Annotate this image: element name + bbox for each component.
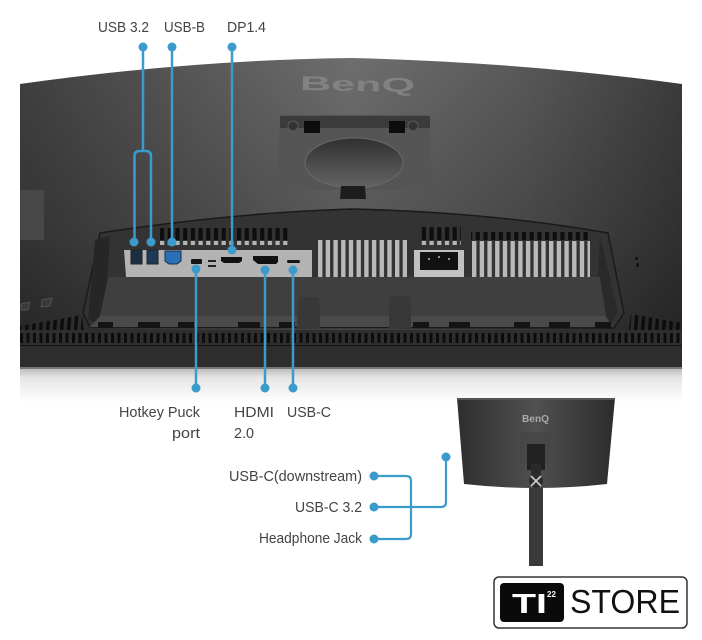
- dark slots: [160, 228, 290, 240]
- port: USB-B: [165, 251, 181, 264]
- mount square right: [389, 121, 405, 133]
- port: hotkey puck: [191, 259, 202, 264]
- lower frame: [20, 330, 682, 346]
- stand clip left: [297, 297, 320, 328]
- labels: side ports: [229, 469, 363, 547]
- labels: top ports: USB 3.2: [98, 20, 149, 36]
- labels: bottom ports: [119, 405, 331, 442]
- small mark: [208, 260, 216, 267]
- cavity floor: [100, 277, 606, 316]
- labels: top ports: [98, 20, 266, 36]
- labels: bottom ports: HDMI: [234, 405, 274, 421]
- floor shadow: [20, 369, 682, 403]
- stand mount recess: [276, 115, 432, 199]
- STORE: STORE: [570, 583, 680, 620]
- vent bars middle: [318, 240, 407, 277]
- round recess: [305, 138, 403, 188]
- port: USB 3.2 pair: [131, 250, 158, 264]
- mount screw right: [408, 121, 418, 131]
- floor clips: [98, 322, 611, 328]
- labels: side ports: USB-C 3.2: [295, 500, 362, 516]
- left side panel: [20, 190, 44, 240]
- TI: TI: [512, 588, 547, 619]
- hinge: [529, 474, 543, 488]
- monitor back: [457, 398, 615, 488]
- labels: side ports: Headphone Jack: [259, 531, 363, 547]
- labels: bottom ports: port: [172, 426, 200, 442]
- mount square left: [304, 121, 320, 133]
- labels: side ports: USB-C(downstream): [229, 469, 362, 485]
- callouts: side ports: [370, 452, 450, 544]
- stand clip right: [389, 296, 411, 328]
- white card: [483, 566, 702, 640]
- black badge: [500, 583, 564, 622]
- vent bars right: [472, 241, 590, 277]
- store logo: [483, 566, 702, 640]
- labels: bottom ports: 2.0: [234, 426, 254, 442]
- side vents left: [20, 315, 85, 343]
- 22: 22: [547, 590, 556, 599]
- callout dots: [130, 42, 298, 392]
- callouts: top ports: [134, 47, 293, 388]
- monitor rear body: [20, 58, 682, 369]
- port: DisplayPort: [221, 257, 242, 263]
- logo frame: [494, 577, 687, 628]
- port: HDMI: [253, 256, 278, 264]
- labels: top ports: DP1.4: [227, 20, 266, 36]
- mount screw left: [288, 121, 298, 131]
- side buttons: [21, 298, 52, 310]
- port cavity: [83, 209, 624, 328]
- latch: [340, 186, 366, 199]
- stand column: [529, 480, 543, 570]
- small mount: [520, 432, 551, 464]
- io plate: [124, 250, 312, 277]
- labels: bottom ports: Hotkey Puck: [119, 405, 201, 421]
- port: USB-C: [287, 260, 300, 263]
- small logo: BenQ: [522, 414, 549, 425]
- side vents right: [627, 314, 682, 343]
- BenQ logo: BenQ: [300, 73, 415, 97]
- labels: bottom ports: USB-C: [287, 405, 331, 421]
- small monitor rear view: [457, 398, 615, 570]
- light squares: [160, 241, 290, 245]
- labels: top ports: USB-B: [164, 20, 205, 36]
- rear indicator holes: [635, 257, 639, 267]
- power socket: [414, 250, 464, 277]
